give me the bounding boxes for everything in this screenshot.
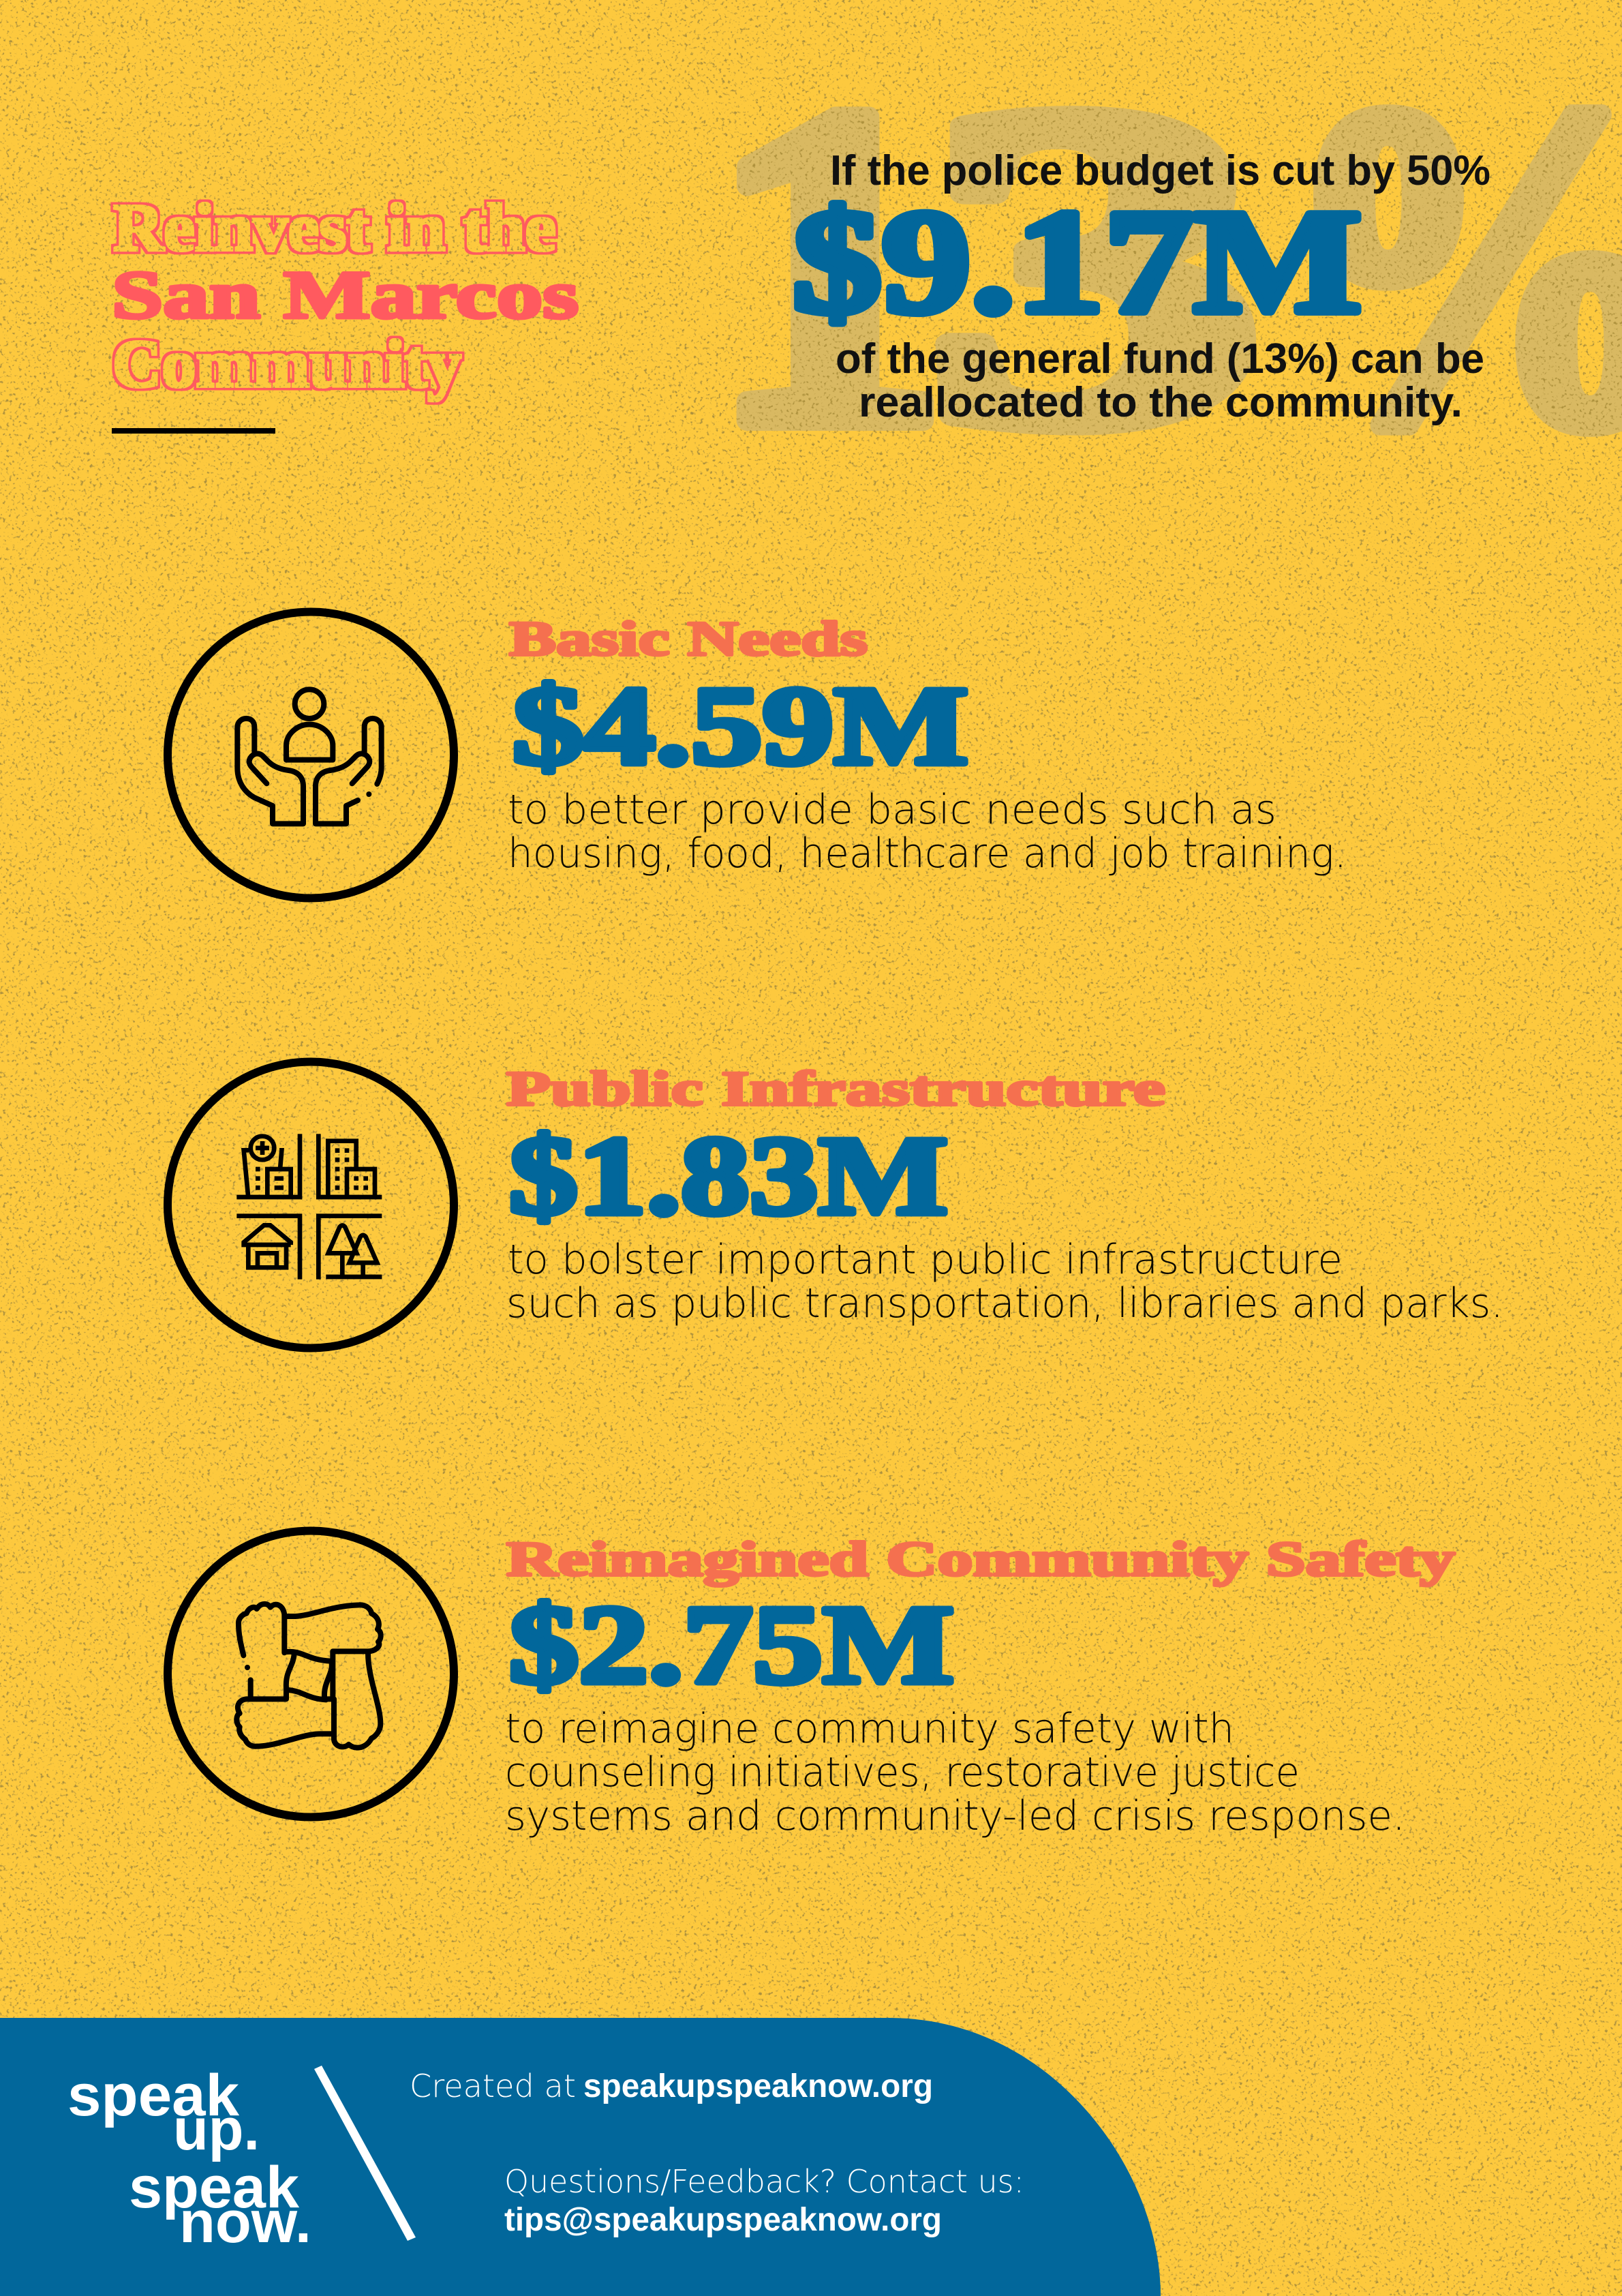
intro line: If the police budget is cut by 50%	[830, 147, 1490, 194]
amount: $1.83M: $1.83M	[509, 1113, 948, 1238]
section: public infrastructure	[168, 1061, 1503, 1348]
logo: speak up. speak now.: speak	[67, 2063, 239, 2128]
title	[112, 190, 579, 402]
title line: Community: Community	[112, 326, 461, 402]
contact details	[504, 2163, 1024, 2238]
amount: $4.59M: $4.59M	[512, 663, 968, 788]
logo: speak up. speak now.: up.	[173, 2097, 260, 2162]
divider slash	[314, 2066, 416, 2241]
contact details: tips@speakupspeaknow.org	[504, 2202, 942, 2238]
description: to bolster important public infrastructure	[508, 1236, 1343, 1284]
ghost figure: 13%: 1	[709, 11, 948, 521]
logo: speak up. speak now.: speak	[129, 2155, 299, 2220]
contact details: Questions/Feedback? Contact us:	[504, 2163, 1024, 2200]
website credit	[410, 2068, 933, 2104]
amount: $2.75M: $2.75M	[509, 1582, 954, 1707]
description	[506, 1236, 1503, 1327]
description line 1: of the general fund (13%) can be	[836, 335, 1484, 382]
heading: Reimagined Community Safety: Reimagined Community Safety	[506, 1532, 1455, 1586]
total amount: $9.17M	[793, 180, 1362, 344]
description: to better provide basic needs such as	[508, 786, 1276, 834]
description: counseling initiatives, restorative justice	[505, 1749, 1300, 1796]
description: systems and community-led crisis response.	[505, 1792, 1405, 1840]
title underline	[112, 428, 275, 434]
footer panel	[0, 2018, 1161, 2296]
description line 2: reallocated to the community.	[859, 379, 1463, 426]
headline stat	[793, 147, 1490, 426]
section: reimagined community safety	[168, 1531, 1455, 1840]
description	[505, 1705, 1405, 1840]
icon: city quadrants	[168, 1062, 454, 1348]
logo: speak up. speak now.	[67, 2063, 311, 2255]
heading: Basic Needs: Basic Needs	[509, 611, 868, 666]
ghost figure: 13%	[709, 11, 1622, 521]
icon: interlocked hands	[168, 1531, 454, 1817]
icon: hands holding person	[168, 612, 454, 898]
heading: Public Infrastructure: Public Infrastructure	[506, 1061, 1165, 1116]
section: basic needs	[168, 611, 1347, 898]
title line: Reinvest in the: Reinvest in the	[113, 190, 556, 265]
description: such as public transportation, libraries and parks.	[506, 1280, 1503, 1327]
website credit: Created at	[410, 2068, 576, 2104]
title line: San Marcos: San Marcos	[112, 257, 579, 333]
logo: speak up. speak now.: now.	[179, 2190, 311, 2255]
website credit: speakupspeaknow.org	[583, 2068, 933, 2104]
description	[508, 786, 1347, 877]
description: housing, food, healthcare and job training.	[508, 830, 1347, 877]
description: to reimagine community safety with	[505, 1705, 1234, 1753]
ghost figure: 13%: 3	[925, 11, 1264, 521]
